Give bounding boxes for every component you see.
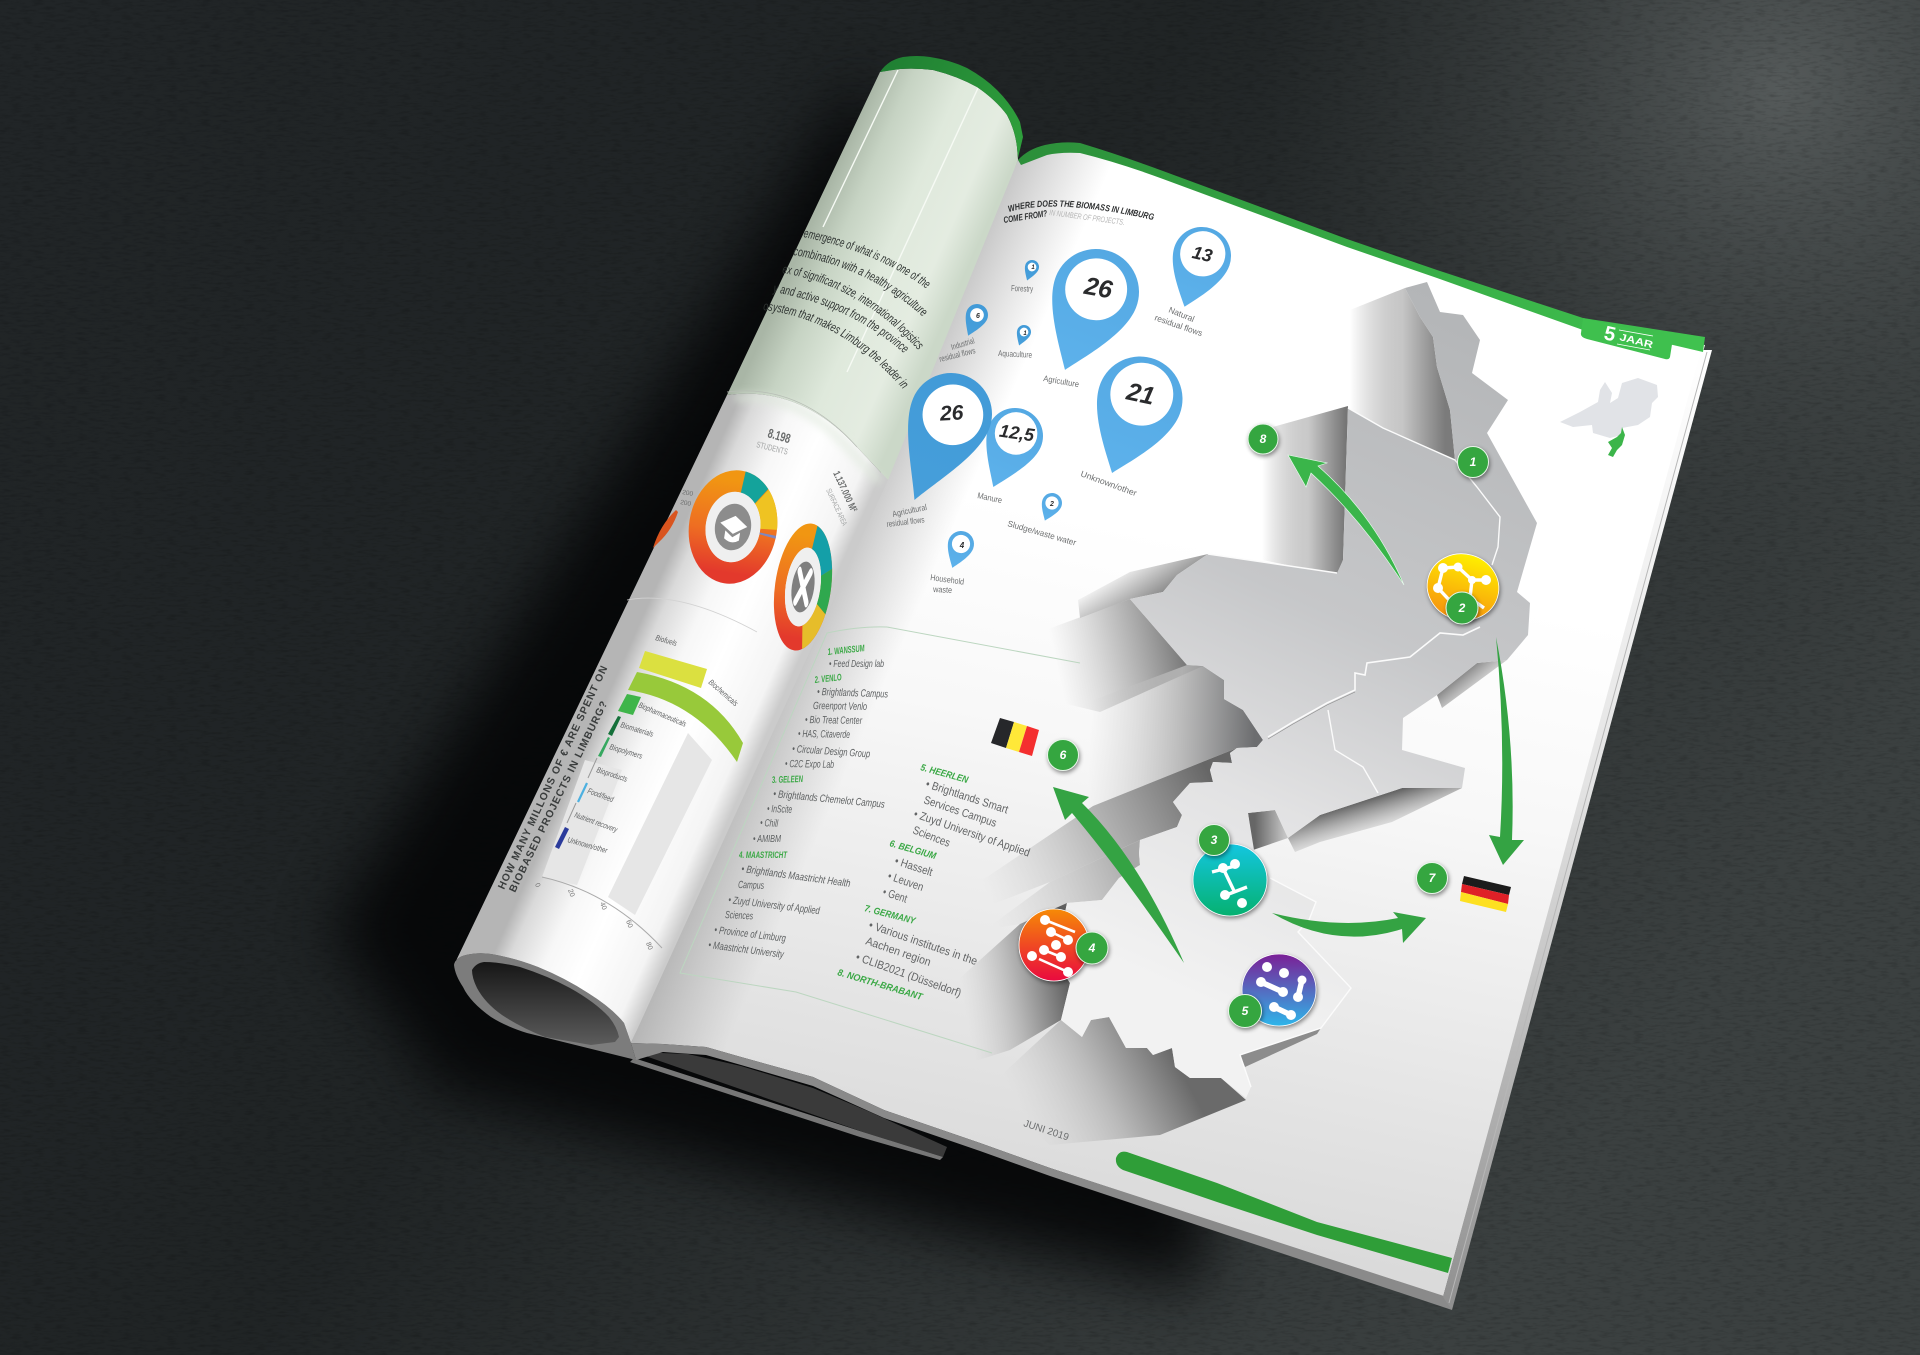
list column: Wanssum to Maastricht: Greenport Venlo [813, 700, 867, 713]
chart bar labels: Unknown/other [566, 835, 609, 855]
list column: Heerlen to North-Brabant: 8. NORTH-BRABANT [836, 967, 925, 1003]
list column: Heerlen to North-Brabant: • Brightlands Smart [924, 778, 1010, 817]
fold lines on the curled page [627, 70, 978, 632]
pin labels: Unknown/other [1079, 468, 1138, 498]
heading: where does the biomass come from: WHERE DOES THE BIOMASS IN LIMBURG [1008, 200, 1154, 220]
list column: Wanssum to Maastricht: 1. WANSSUM [827, 643, 866, 658]
surface area stat [824, 470, 859, 527]
badge 7: 7 [1429, 871, 1437, 885]
list column: Heerlen to North-Brabant: • Gent [881, 886, 909, 906]
map top surface [1055, 282, 1537, 1098]
donut partially hidden on the page edge: 200 [682, 489, 694, 498]
list column: Wanssum to Maastricht: Sciences [725, 909, 754, 922]
list column: Wanssum to Maastricht: • HAS, Citaverde [798, 728, 850, 741]
pin labels: residual flows [938, 345, 976, 364]
pin labels: Aquaculture [998, 348, 1033, 360]
chart tick labels: 0 [533, 882, 541, 888]
list column: Wanssum to Maastricht: • C2C Expo Lab [785, 758, 834, 771]
list column: Wanssum to Maastricht: 2. VENLO [814, 672, 843, 686]
right page with curved top and bottom edges [631, 148, 1705, 1297]
pin values: 1 [1023, 331, 1027, 337]
chart title: BIOBASED PROJECTS IN LIMBURG? [507, 699, 611, 894]
list column: Heerlen to North-Brabant: Aachen region [864, 935, 932, 969]
tab: 5 JAAR: 5 [1602, 322, 1618, 346]
badge 8 [1248, 424, 1278, 454]
page block edge along the bottom [631, 1043, 1452, 1310]
pin labels: Agriculture [1043, 373, 1080, 389]
list column: Heerlen to North-Brabant: • Various institutes in the [867, 919, 979, 968]
students stat: STUDENTS [756, 439, 789, 457]
list column: Wanssum to Maastricht: • Bio Treat Center [805, 714, 862, 727]
list column: Wanssum to Maastricht: • Maastricht University [708, 939, 785, 961]
shading along the spine [631, 152, 1099, 1046]
text block: intro on the curled page [764, 230, 930, 388]
badge 7 [1416, 862, 1448, 894]
icon: Venlo yellow molecule [1420, 546, 1506, 628]
pin: manure 12,5 [968, 399, 1052, 498]
list column: Heerlen to North-Brabant: 7. GERMANY [863, 903, 918, 927]
pin labels: Natural [1167, 305, 1196, 324]
text block: intro on the curled page: emergence of what is now one of the [804, 230, 930, 288]
list column: Heerlen to North-Brabant: Services Campus [922, 794, 998, 830]
green rim on the curled page [880, 56, 1023, 158]
arrow: to Germany (down) [1489, 637, 1524, 865]
icon: Maastricht red molecule [1019, 909, 1089, 981]
surface area stat: SURFACE AREA [824, 487, 849, 527]
curled left page: pale green upper part [727, 69, 1018, 480]
chart tick labels: 20 [566, 888, 575, 898]
mini map of the Netherlands with Limburg highlighted [1560, 378, 1658, 457]
chart tick labels [533, 882, 653, 951]
text block: intro on the curled page: osystem that makes Limburg the leader in [764, 304, 908, 388]
pin: forestry 1 [1021, 258, 1041, 283]
text block: intro on the curled page: combination with a healthy agriculture [794, 248, 926, 316]
badge 4: 4 [1088, 941, 1096, 955]
chart tick labels: 80 [644, 941, 653, 951]
chart bar labels [566, 633, 740, 855]
list column: Heerlen to North-Brabant: • Leuven [886, 870, 925, 894]
list column: Wanssum to Maastricht: • Feed Design lab [829, 658, 884, 670]
badge 1 [1458, 446, 1488, 478]
chart tick labels: 40 [598, 901, 607, 911]
inner lower cover under the right page [630, 1052, 947, 1160]
chart bar labels: Biopolymers [608, 742, 644, 761]
pin: agricultural residual flows 26 [877, 360, 1005, 516]
badge 3: 3 [1211, 833, 1218, 847]
list column: Heerlen to North-Brabant: 6. BELGIUM [888, 838, 938, 862]
list column: Heerlen to North-Brabant: • Zuyd University of Applied [912, 808, 1031, 860]
pin: industrial residual flows 6 [958, 301, 991, 340]
tab: 5 JAAR: JAAR [1618, 332, 1655, 351]
badge 4 [1076, 932, 1108, 964]
pin labels: residual flows [886, 514, 925, 529]
chart bar labels: Biopharmaceuticals [637, 701, 688, 729]
badge 5: 5 [1242, 1004, 1249, 1018]
chart grid bands [542, 733, 712, 915]
list column: Heerlen to North-Brabant [836, 762, 1031, 1003]
heading: where does the biomass come from: COME FROM? [1003, 208, 1048, 225]
donut partially hidden on the page edge [653, 489, 694, 548]
pin labels: Industrial [950, 335, 976, 352]
icon: Geleen teal molecule [1193, 844, 1267, 916]
donut chart: students [673, 455, 793, 599]
list column: Wanssum to Maastricht: • Brightlands Maastricht Health [741, 863, 851, 890]
pin values: 2 [1049, 501, 1054, 508]
magazine cast shadow [330, 70, 1210, 1290]
students stat [756, 425, 792, 457]
list column: Heerlen to North-Brabant: • CLIB2021 (Düsseldorf) [854, 952, 963, 1000]
pin labels: Forestry [1011, 283, 1034, 294]
chart tick labels: 60 [624, 919, 633, 929]
pin: natural residual flows 13 [1157, 219, 1239, 316]
chart bar labels: Nutrient recovery [573, 810, 619, 835]
pin labels: Household [930, 572, 965, 587]
text block: intro on the curled page: ex of significant size, international logistics [782, 266, 922, 350]
chart axis [542, 877, 662, 948]
list column: Wanssum to Maastricht: • Chill [760, 817, 779, 830]
panel: list of locations [680, 627, 1080, 1053]
list column: Wanssum to Maastricht: • Zuyd University of Applied [728, 894, 821, 917]
pin labels: Manure [977, 490, 1003, 505]
date: JUNI 2019: JUNI 2019 [1022, 1118, 1071, 1144]
location badges [1048, 424, 1488, 1028]
flag: Belgium [991, 718, 1039, 756]
list column: Wanssum to Maastricht: • Province of Limburg [714, 924, 787, 945]
tab: 5 JAAR [1581, 318, 1673, 359]
pin values: 1 [1031, 265, 1035, 271]
arrow: to Germany (right) [1272, 912, 1426, 943]
pin values: 4 [959, 541, 965, 550]
pin values: 12,5 [998, 421, 1037, 446]
pin values: 13 [1190, 242, 1214, 266]
chart bar labels: Biochemicals [707, 678, 740, 708]
badge 1: 1 [1470, 455, 1477, 469]
chart bar labels: Bioproducts [595, 765, 629, 784]
students stat: 8.198 [766, 425, 792, 446]
donut chart: surface area [764, 516, 842, 658]
pin labels [886, 283, 1204, 595]
pin values: 6 [976, 313, 980, 320]
pin values: 26 [1081, 272, 1116, 305]
list column: Heerlen to North-Brabant: Sciences [911, 825, 952, 850]
pin labels: residual flows [1153, 312, 1204, 338]
badge 3 [1198, 824, 1230, 856]
map: Limburg top surface and borders [1055, 282, 1537, 1098]
icon: Heerlen purple molecule [1242, 954, 1316, 1026]
pin: household waste 4 [940, 527, 978, 572]
donut partially hidden on the page edge: 200 [680, 499, 692, 508]
list column: Wanssum to Maastricht: 3. GELEEN [772, 774, 804, 786]
magazine [454, 56, 1712, 1310]
badge 6: 6 [1060, 748, 1067, 762]
pin: aquaculture 1 [1013, 323, 1033, 348]
pin values: 26 [938, 401, 964, 426]
green rim on the right page [1018, 142, 1705, 352]
badge 6 [1048, 740, 1078, 770]
icon: cross tools [795, 571, 811, 603]
green footer bar [1116, 1152, 1452, 1273]
list column: Wanssum to Maastricht: Campus [738, 879, 765, 892]
heading: where does the biomass come from: IN NUMBER OF PROJECTS. [1049, 208, 1125, 227]
page block edge along the right side [1443, 350, 1712, 1310]
chart bars [555, 651, 743, 849]
badge 2: 2 [1458, 601, 1466, 615]
icon: graduation cap [718, 514, 749, 544]
list column: Wanssum to Maastricht [708, 643, 889, 961]
list column: Wanssum to Maastricht: • Circular Design Group [792, 743, 871, 760]
pin: sludge/waste water 2 [1036, 490, 1065, 524]
badge 8: 8 [1260, 432, 1267, 446]
pin values: 21 [1123, 377, 1157, 411]
text block: intro on the curled page: y and active support from the province [772, 286, 908, 352]
chart bar labels: Biomaterials [619, 720, 655, 739]
pin: unknown/other 21 [1072, 344, 1195, 488]
list column: Wanssum to Maastricht: • InScite [767, 803, 792, 816]
curled left page: white lower part [454, 394, 888, 1043]
list column: Heerlen to North-Brabant: 5. HEERLEN [919, 762, 970, 786]
pin labels: Agricultural [891, 502, 928, 519]
pin labels: waste [932, 584, 953, 595]
map shadows [960, 288, 1507, 1145]
list column: Wanssum to Maastricht: • Brightlands Chemelot Campus [773, 788, 886, 811]
surface area stat: 1.137.000 M² [830, 470, 859, 515]
flag: Germany [1460, 876, 1511, 912]
list column: Wanssum to Maastricht: 4. MAASTRICHT [738, 850, 788, 861]
pin chart: biomass sources [877, 219, 1239, 595]
chart title: HOW MANY MILLONS OF € ARE SPENT ON [496, 663, 611, 891]
region borders [1208, 408, 1500, 1087]
list column: Wanssum to Maastricht: • Brightlands Campus [817, 686, 889, 700]
bar chart: millions of euros per biobased category [496, 633, 743, 951]
pin values [938, 242, 1214, 550]
chart bar labels: Biofuels [654, 633, 678, 648]
arrow: to Belgium [1053, 787, 1184, 963]
badge 2 [1446, 592, 1478, 624]
pin labels: Sludge/waste water [1006, 518, 1078, 548]
curled page edge: page block and hole [454, 953, 636, 1060]
list column: Wanssum to Maastricht: • AMIBM [753, 833, 781, 845]
pin: agriculture 26 [1025, 236, 1152, 386]
arrow: to North-Brabant [1288, 455, 1404, 585]
badge 5 [1228, 994, 1262, 1028]
list column: Heerlen to North-Brabant: • Hasselt [893, 855, 935, 879]
chart bar labels: Food/feed [586, 786, 615, 804]
